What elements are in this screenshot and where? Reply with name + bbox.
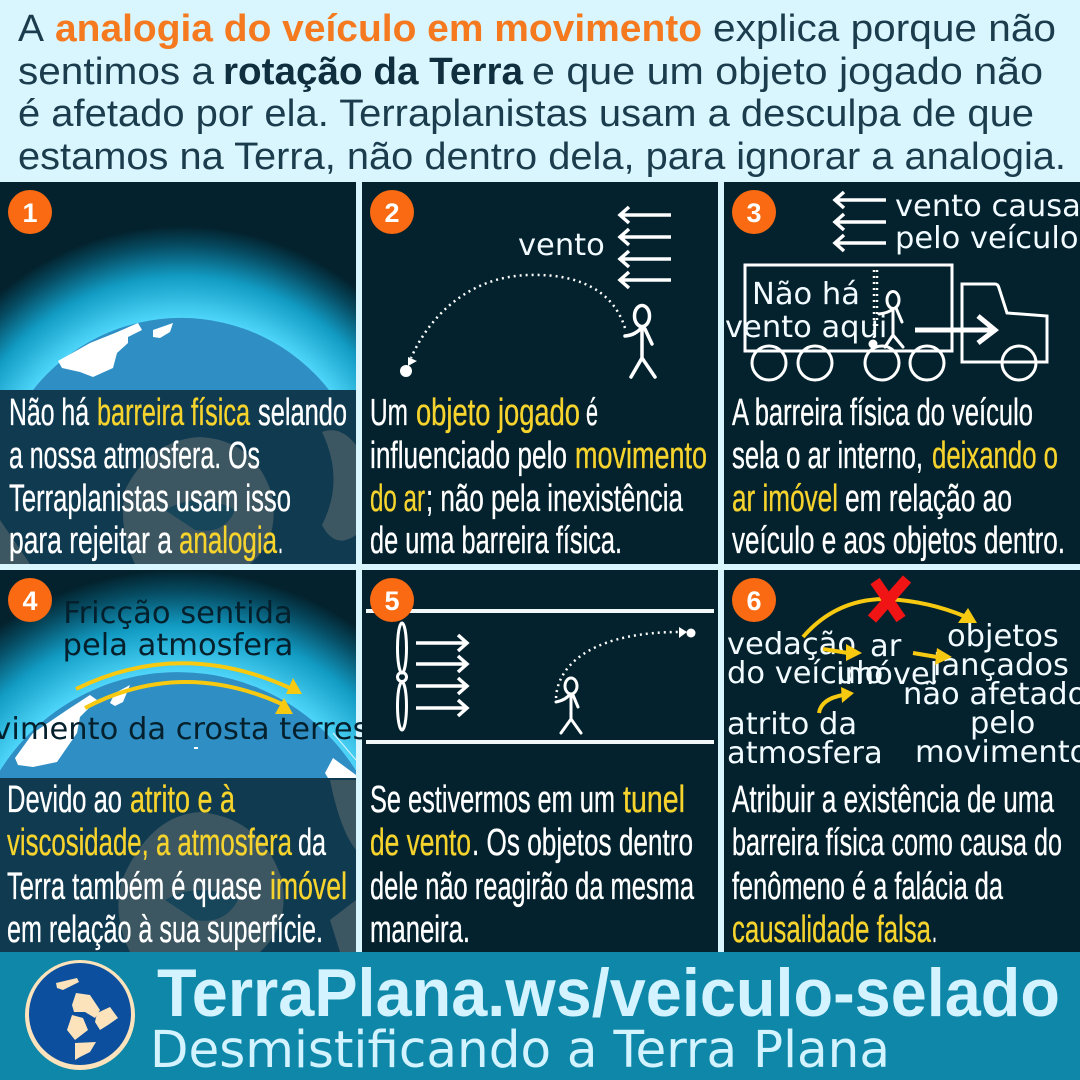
caption 6: [732, 779, 1062, 951]
panel 6: false cause: [724, 570, 1080, 952]
caption 1: a nossa atmosfera. Os: [9, 435, 260, 477]
caption 6: causalidade falsa: [732, 909, 932, 951]
caption 2: [370, 392, 707, 562]
caption 2: é: [586, 392, 598, 434]
caption 1: selando: [258, 392, 347, 434]
caption 2: ; não pela inexistência: [426, 478, 684, 520]
motion arrow: [915, 316, 995, 343]
footer band: [0, 952, 1080, 1080]
number badge 5: 5: [384, 586, 400, 616]
caption 3: [732, 392, 1065, 562]
caption 5: maneira.: [370, 909, 470, 951]
fan: [398, 623, 406, 730]
vehicle wind arrows: [835, 192, 886, 251]
dotted trajectory: [556, 627, 696, 698]
tagline: Desmistificando a Terra Plana: [150, 1021, 890, 1080]
small yellow arrows: [819, 644, 952, 713]
title: explica porque não: [713, 8, 1056, 50]
caption 5: . Os objetos dentro: [472, 822, 693, 864]
title: é afetado por ela. Terraplanistas usam a desculpa de que: [18, 93, 1034, 135]
stick figure with dotted vertical throw: [868, 270, 903, 348]
caption 1: [9, 392, 347, 562]
caption 1: analogia: [179, 520, 278, 562]
diagram labels: objetos: [947, 619, 1059, 654]
red cross: [872, 579, 907, 619]
number badge 4: [8, 578, 52, 622]
caption 2: objeto jogado: [416, 392, 580, 434]
caption 1: .: [278, 520, 283, 562]
title: A: [18, 8, 45, 50]
caption 1: para rejeitar a: [9, 520, 173, 562]
caption 2: movimento: [575, 435, 707, 477]
label: no wind here: [725, 277, 887, 345]
icon: flat earth logo: [25, 960, 135, 1070]
caption 2: influenciado pelo: [370, 435, 567, 477]
panel 4: atmosphere friction: [0, 570, 362, 952]
diagram labels: [727, 619, 1080, 771]
caption 2: Um: [370, 392, 408, 434]
site url: TerraPlana.ws/veiculo-selado: [157, 955, 1060, 1031]
label: no wind here: vento aqui: [725, 310, 887, 345]
caption 5: dele não reagirão da mesma: [370, 866, 695, 908]
caption 2: de uma barreira física.: [370, 520, 622, 562]
caption 3: sela o ar interno,: [732, 435, 923, 477]
number badge 2: [370, 190, 414, 234]
caption 2: do ar: [370, 478, 425, 520]
caption 1: Não há: [9, 392, 90, 434]
caption 5: Se estivermos em um: [370, 779, 615, 821]
number badge 4: 4: [22, 586, 38, 616]
caption 5: tunel: [623, 779, 685, 821]
label: friction felt by atmosphere: Fricção sentida: [63, 596, 293, 631]
caption 5: [370, 779, 695, 951]
stick figure: [625, 306, 655, 377]
globe with atmosphere: [0, 182, 356, 564]
number badge 1: 1: [22, 198, 38, 228]
caption 4: da: [298, 822, 327, 864]
label: friction felt by atmosphere: [63, 596, 293, 663]
number badge 5: [370, 578, 414, 622]
panel 5: wind tunnel: [362, 570, 718, 952]
label: wind caused by vehicle: [895, 189, 1080, 256]
panel 1: no physical barrier: [0, 182, 356, 564]
caption 1: barreira física: [97, 392, 251, 434]
dotted trajectory: [400, 275, 625, 377]
title: estamos na Terra, não dentro dela, para ignorar a analogia.: [18, 136, 1066, 178]
number badge 3: 3: [746, 198, 762, 228]
caption 4: imóvel: [270, 866, 347, 908]
caption 4: Devido ao: [7, 779, 122, 821]
caption 4: Terra também é quase: [7, 866, 262, 908]
tunnel walls: [366, 611, 714, 742]
yellow arrows: [76, 663, 302, 714]
diagram labels: ar: [870, 629, 902, 664]
caption 4: atrito e à: [130, 779, 236, 821]
diagram labels: lançados: [933, 648, 1069, 683]
caption 4: viscosidade, a atmosfera: [7, 822, 293, 864]
panel 2: thrown object and wind: [362, 182, 718, 564]
number badge 3: [732, 190, 776, 234]
caption 4: [7, 779, 347, 951]
stick figure: [556, 678, 581, 733]
crossed-out causal arrow: [803, 599, 977, 637]
label: vento: vento: [518, 228, 605, 263]
caption 3: em relação ao: [845, 478, 1012, 520]
title: e que um objeto jogado não: [532, 51, 1043, 93]
diagram labels: vedação: [727, 627, 856, 662]
title: rotação da Terra: [223, 51, 524, 93]
truck: [745, 265, 1047, 380]
title: sentimos a: [18, 51, 215, 93]
label: no wind here: Não há: [752, 277, 860, 312]
tunnel wind arrows: [416, 635, 467, 716]
label: friction felt by atmosphere: pela atmosfera: [63, 628, 293, 663]
diagram labels: atrito da: [727, 707, 857, 742]
diagram labels: pelo: [970, 706, 1035, 741]
label: wind caused by vehicle: pelo veículo: [895, 221, 1078, 256]
caption 6: .: [932, 909, 937, 951]
number badge 2: 2: [384, 198, 400, 228]
number badge 1: [8, 190, 52, 234]
title: [18, 8, 1066, 178]
panel 3: sealed vehicle: [724, 182, 1080, 564]
diagram labels: atmosfera: [727, 736, 883, 771]
number badge 6: [732, 578, 776, 622]
caption 5: de vento: [370, 822, 471, 864]
caption 3: ar imóvel: [732, 478, 838, 520]
wind arrows: [620, 207, 671, 288]
number badge 6: 6: [746, 586, 762, 616]
diagram labels: do veículo: [727, 656, 883, 691]
caption 4: em relação à sua superfície.: [7, 909, 323, 951]
title: analogia do veículo em movimento: [55, 8, 702, 50]
caption 1: Terraplanistas usam isso: [9, 478, 291, 520]
globe with atmosphere: [0, 570, 360, 952]
diagram labels: imóvel: [836, 657, 938, 692]
